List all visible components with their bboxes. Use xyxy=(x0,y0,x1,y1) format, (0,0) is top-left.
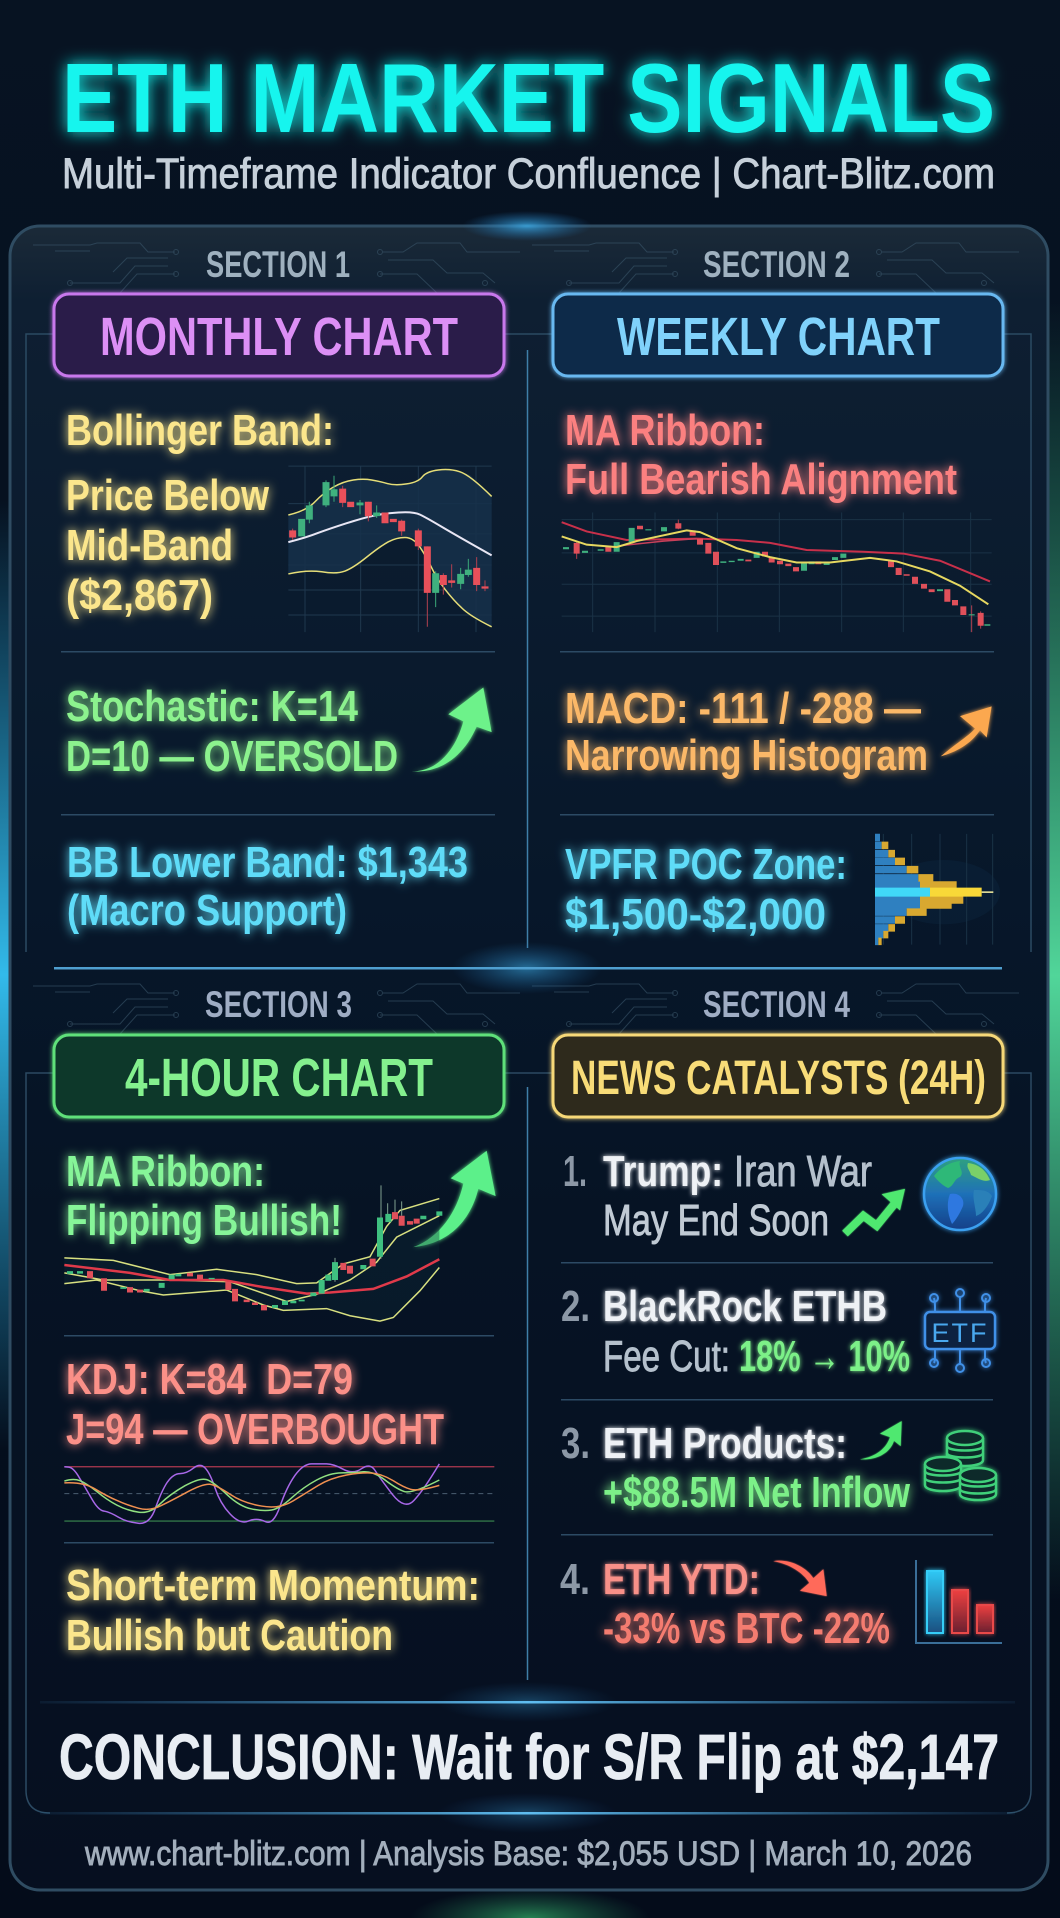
vpfr text xyxy=(565,840,847,939)
news item 3 xyxy=(561,1419,911,1517)
header: 4-hour chart xyxy=(54,1035,504,1117)
section 2 label: SECTION 2 xyxy=(703,244,850,285)
kdj text: J=94 — OVERBOUGHT xyxy=(66,1405,444,1454)
ma ribbon text: MA Ribbon: xyxy=(565,406,765,455)
bollinger text: Mid-Band xyxy=(66,521,233,570)
news item 2: 18% → 10% xyxy=(739,1332,910,1381)
header: 4-hour chart: 4-HOUR CHART xyxy=(125,1048,433,1108)
divider xyxy=(560,651,994,652)
news item 2: 2. xyxy=(561,1282,590,1331)
conclusion rule top xyxy=(40,1682,1015,1722)
news item 4 xyxy=(560,1555,890,1653)
arrow: down xyxy=(773,1561,827,1596)
macd text: MACD: -111 / -288 — xyxy=(565,684,921,733)
section 3 label: SECTION 3 xyxy=(205,984,352,1025)
divider xyxy=(560,814,994,816)
ma ribbon text xyxy=(565,406,957,504)
circuit decor row 2 right xyxy=(532,984,1019,1034)
ma ribbon text: Full Bearish Alignment xyxy=(565,455,957,504)
vpfr text: $1,500-$2,000 xyxy=(565,890,826,939)
momentum text: Short-term Momentum: xyxy=(66,1561,480,1610)
section 4 label: SECTION 4 xyxy=(703,984,850,1025)
divider xyxy=(561,1534,993,1536)
news item 1 xyxy=(563,1147,872,1245)
bollinger text: Bollinger Band: xyxy=(66,406,334,455)
center column dividers xyxy=(526,350,528,1680)
circuit decor row 2 left xyxy=(33,984,520,1034)
conclusion rule bottom xyxy=(40,1793,1015,1833)
news item 4: -33% vs BTC -22% xyxy=(603,1604,890,1653)
icon: bar chart xyxy=(916,1560,1002,1643)
bollinger text xyxy=(66,406,334,620)
ma ribbon bullish text xyxy=(66,1147,342,1245)
stochastic text xyxy=(66,682,398,781)
mid separator xyxy=(54,942,1002,994)
news item 1: Iran War xyxy=(734,1147,872,1196)
stochastic text: Stochastic: K=14 xyxy=(66,682,358,731)
volume profile chart xyxy=(875,834,1000,945)
panel connector lines xyxy=(26,334,1031,1813)
icon: globe xyxy=(924,1158,996,1230)
macd text: Narrowing Histogram xyxy=(565,731,928,780)
left edge glow xyxy=(0,500,9,1450)
kdj text xyxy=(66,1355,444,1454)
momentum text xyxy=(66,1561,480,1660)
macd text xyxy=(565,684,928,780)
arrow: macd up xyxy=(941,706,992,756)
kdj text: KDJ: K=84 D=79 xyxy=(66,1355,353,1404)
bb lower band text: (Macro Support) xyxy=(67,886,347,935)
news item 2 xyxy=(561,1282,910,1381)
news item 3: ETH Products: xyxy=(603,1419,847,1468)
header: weekly chart: WEEKLY CHART xyxy=(617,307,940,367)
top panel glow xyxy=(462,211,592,241)
news item 4: 4. xyxy=(560,1555,590,1604)
header: news catalysts xyxy=(553,1035,1003,1117)
icon: coin stacks xyxy=(925,1431,996,1500)
divider xyxy=(64,1542,494,1544)
divider xyxy=(561,1262,993,1264)
bottom green glow xyxy=(410,1888,650,1918)
bollinger band chart xyxy=(288,466,492,632)
panel: 4-hour xyxy=(64,1147,496,1660)
news item 4: ETH YTD: xyxy=(603,1555,760,1604)
arrow: oversold up xyxy=(412,687,492,772)
arrow: bullish flip xyxy=(413,1151,496,1247)
momentum text: Bullish but Caution xyxy=(66,1611,393,1660)
news item 1: 1. xyxy=(563,1147,587,1196)
panel: weekly xyxy=(560,406,1000,945)
right edge glow xyxy=(1048,300,1060,1600)
ma ribbon bullish text: Flipping Bullish! xyxy=(66,1196,342,1245)
header: weekly chart xyxy=(553,294,1003,376)
4-hour ribbon chart xyxy=(64,1185,439,1321)
section 1 label: SECTION 1 xyxy=(206,244,350,285)
kdj oscillator chart xyxy=(64,1464,494,1523)
ma ribbon bullish text: MA Ribbon: xyxy=(66,1147,265,1196)
arrow: inflow up xyxy=(860,1421,902,1459)
circuit decor row 1 right xyxy=(532,243,1019,293)
panel: news xyxy=(560,1147,1002,1653)
header: monthly chart xyxy=(54,294,504,376)
vpfr text: VPFR POC Zone: xyxy=(565,840,847,889)
arrow: zigzag up xyxy=(845,1189,905,1234)
weekly ma chart xyxy=(562,512,992,632)
divider xyxy=(64,1335,494,1336)
divider xyxy=(61,651,495,652)
news item 1: Trump: xyxy=(603,1147,723,1196)
bollinger text: ($2,867) xyxy=(66,571,213,620)
bb lower band text: BB Lower Band: $1,343 xyxy=(67,838,468,887)
divider xyxy=(61,814,495,816)
divider xyxy=(561,1399,993,1400)
panel: monthly xyxy=(61,406,495,935)
news item 2: BlackRock ETHB xyxy=(603,1282,887,1331)
stochastic text: D=10 — OVERSOLD xyxy=(66,732,398,781)
news item 2: Fee Cut: xyxy=(603,1332,730,1381)
bollinger text: Price Below xyxy=(66,471,270,520)
bb lower band text xyxy=(67,838,468,935)
news item 3: +$88.5M Net Inflow xyxy=(603,1468,911,1517)
header: monthly chart: MONTHLY CHART xyxy=(100,307,458,367)
icon: etf chip: ETF xyxy=(932,1318,988,1348)
icon: etf chip xyxy=(925,1289,995,1372)
circuit decor row 1 left xyxy=(33,243,520,293)
news item 3: 3. xyxy=(561,1419,590,1468)
news item 1: May End Soon xyxy=(603,1196,829,1245)
